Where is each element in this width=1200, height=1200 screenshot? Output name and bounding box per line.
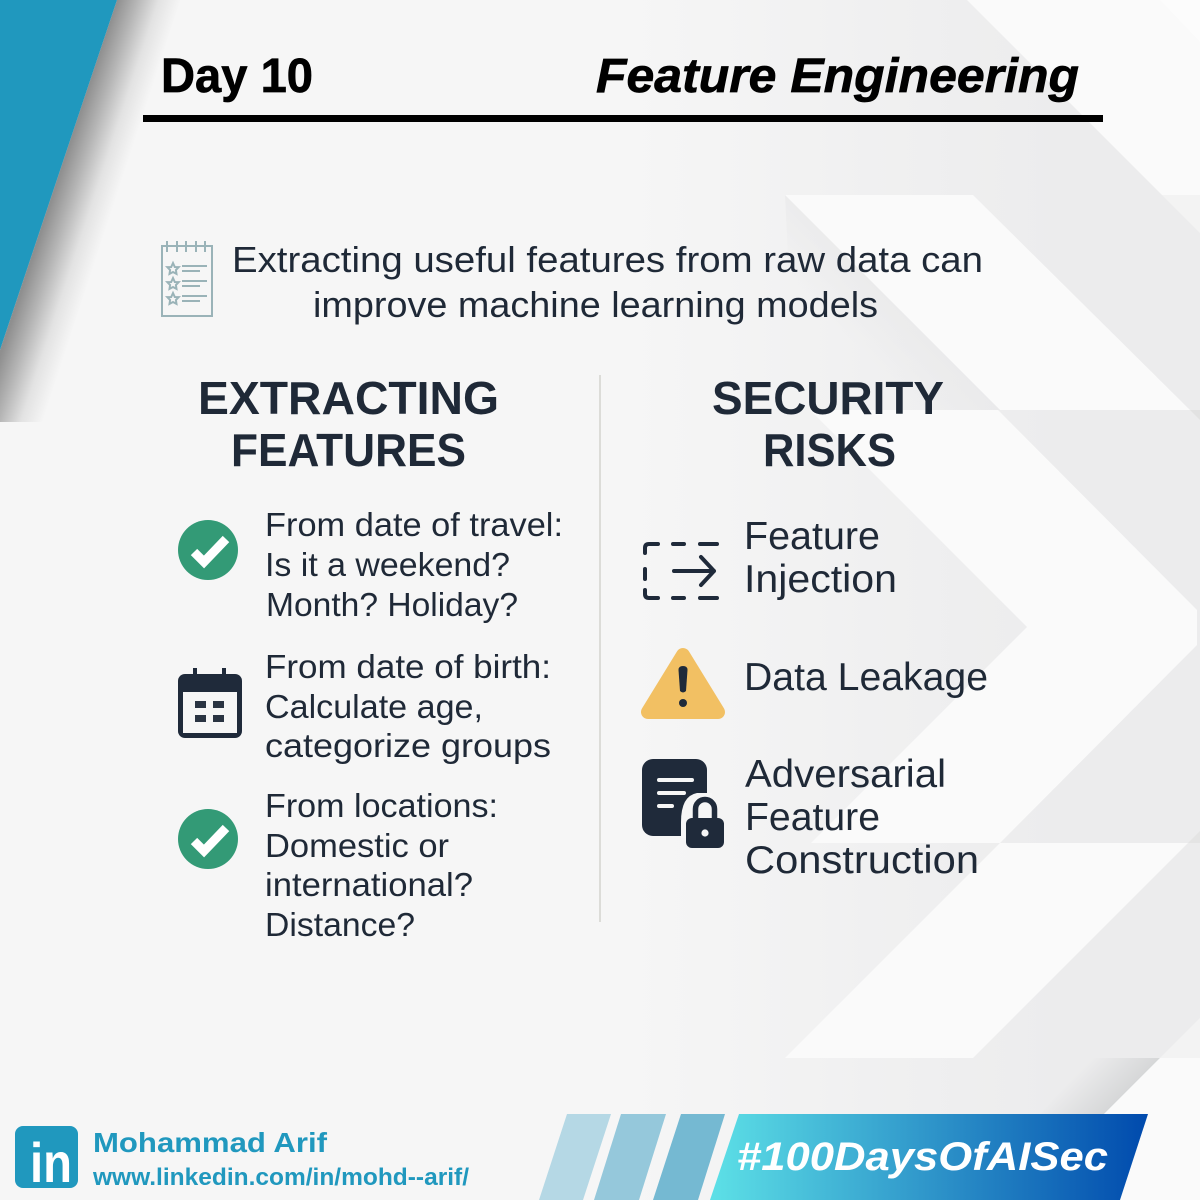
author url: www.linkedin.com/in/mohd--arif/: [92, 1164, 469, 1191]
text: date of travel: Is it a weekend?: [265, 546, 510, 583]
icon: dashed box with arrow: [645, 544, 717, 598]
icon: green check 1: [178, 520, 238, 580]
title rule: [143, 115, 1103, 122]
author name: Mohammad Arif: [93, 1127, 328, 1158]
heading: security risks: SECURITY: [712, 372, 944, 424]
intro text: Extracting useful features from raw data can: [232, 239, 983, 280]
text: locations: [265, 787, 498, 943]
text: feature injection: Feature: [744, 515, 880, 558]
text: date of travel: Month? Holiday?: [266, 586, 518, 623]
title: day: Day 10: [161, 50, 313, 103]
text: feature injection: Injection: [744, 558, 897, 601]
icon: warning triangle: [648, 655, 718, 712]
text: date of travel: From date of travel:: [265, 506, 563, 543]
hashtag banner: #100DaysOfAISec: [737, 1135, 1108, 1179]
icon: notebook with stars: [162, 241, 212, 316]
intro text: [232, 239, 983, 325]
text: date of birth: [265, 648, 551, 764]
icon: linkedin: in: [30, 1131, 72, 1194]
text: date of travel: [265, 506, 563, 623]
icon: linkedin: [15, 1126, 78, 1194]
heading: extracting features: EXTRACTING: [198, 372, 499, 424]
text: locations: international?: [265, 866, 473, 903]
icon: document with lock: [642, 759, 724, 848]
text: adversarial feature construction: Adversarial: [745, 753, 946, 796]
text: locations: Domestic or: [265, 827, 449, 864]
text: adversarial feature construction: [745, 753, 979, 882]
text: adversarial feature construction: Feature: [745, 796, 880, 839]
title: topic: Feature Engineering: [596, 50, 1079, 103]
text: data leakage: Data Leakage: [744, 656, 988, 699]
decorative stripes: [539, 1114, 725, 1200]
hashtag banner: [710, 1114, 1148, 1200]
text: adversarial feature construction: Construction: [745, 839, 979, 882]
text: locations: From locations:: [265, 787, 498, 824]
text: date of birth: From date of birth:: [265, 648, 551, 685]
heading: extracting features: FEATURES: [231, 424, 466, 476]
heading: security risks: [712, 372, 944, 476]
text: date of birth: Calculate age,: [265, 688, 483, 725]
heading: security risks: RISKS: [763, 424, 896, 476]
icon: calendar: [178, 668, 242, 738]
icon: green check 2: [178, 809, 238, 869]
heading: extracting features: [198, 372, 499, 476]
intro text: improve machine learning models: [313, 284, 878, 325]
center divider: [599, 375, 601, 922]
text: locations: Distance?: [265, 906, 415, 943]
text: feature injection: [744, 515, 897, 601]
text: date of birth: categorize groups: [265, 727, 551, 764]
left blue corner with shadow: [0, 0, 210, 422]
